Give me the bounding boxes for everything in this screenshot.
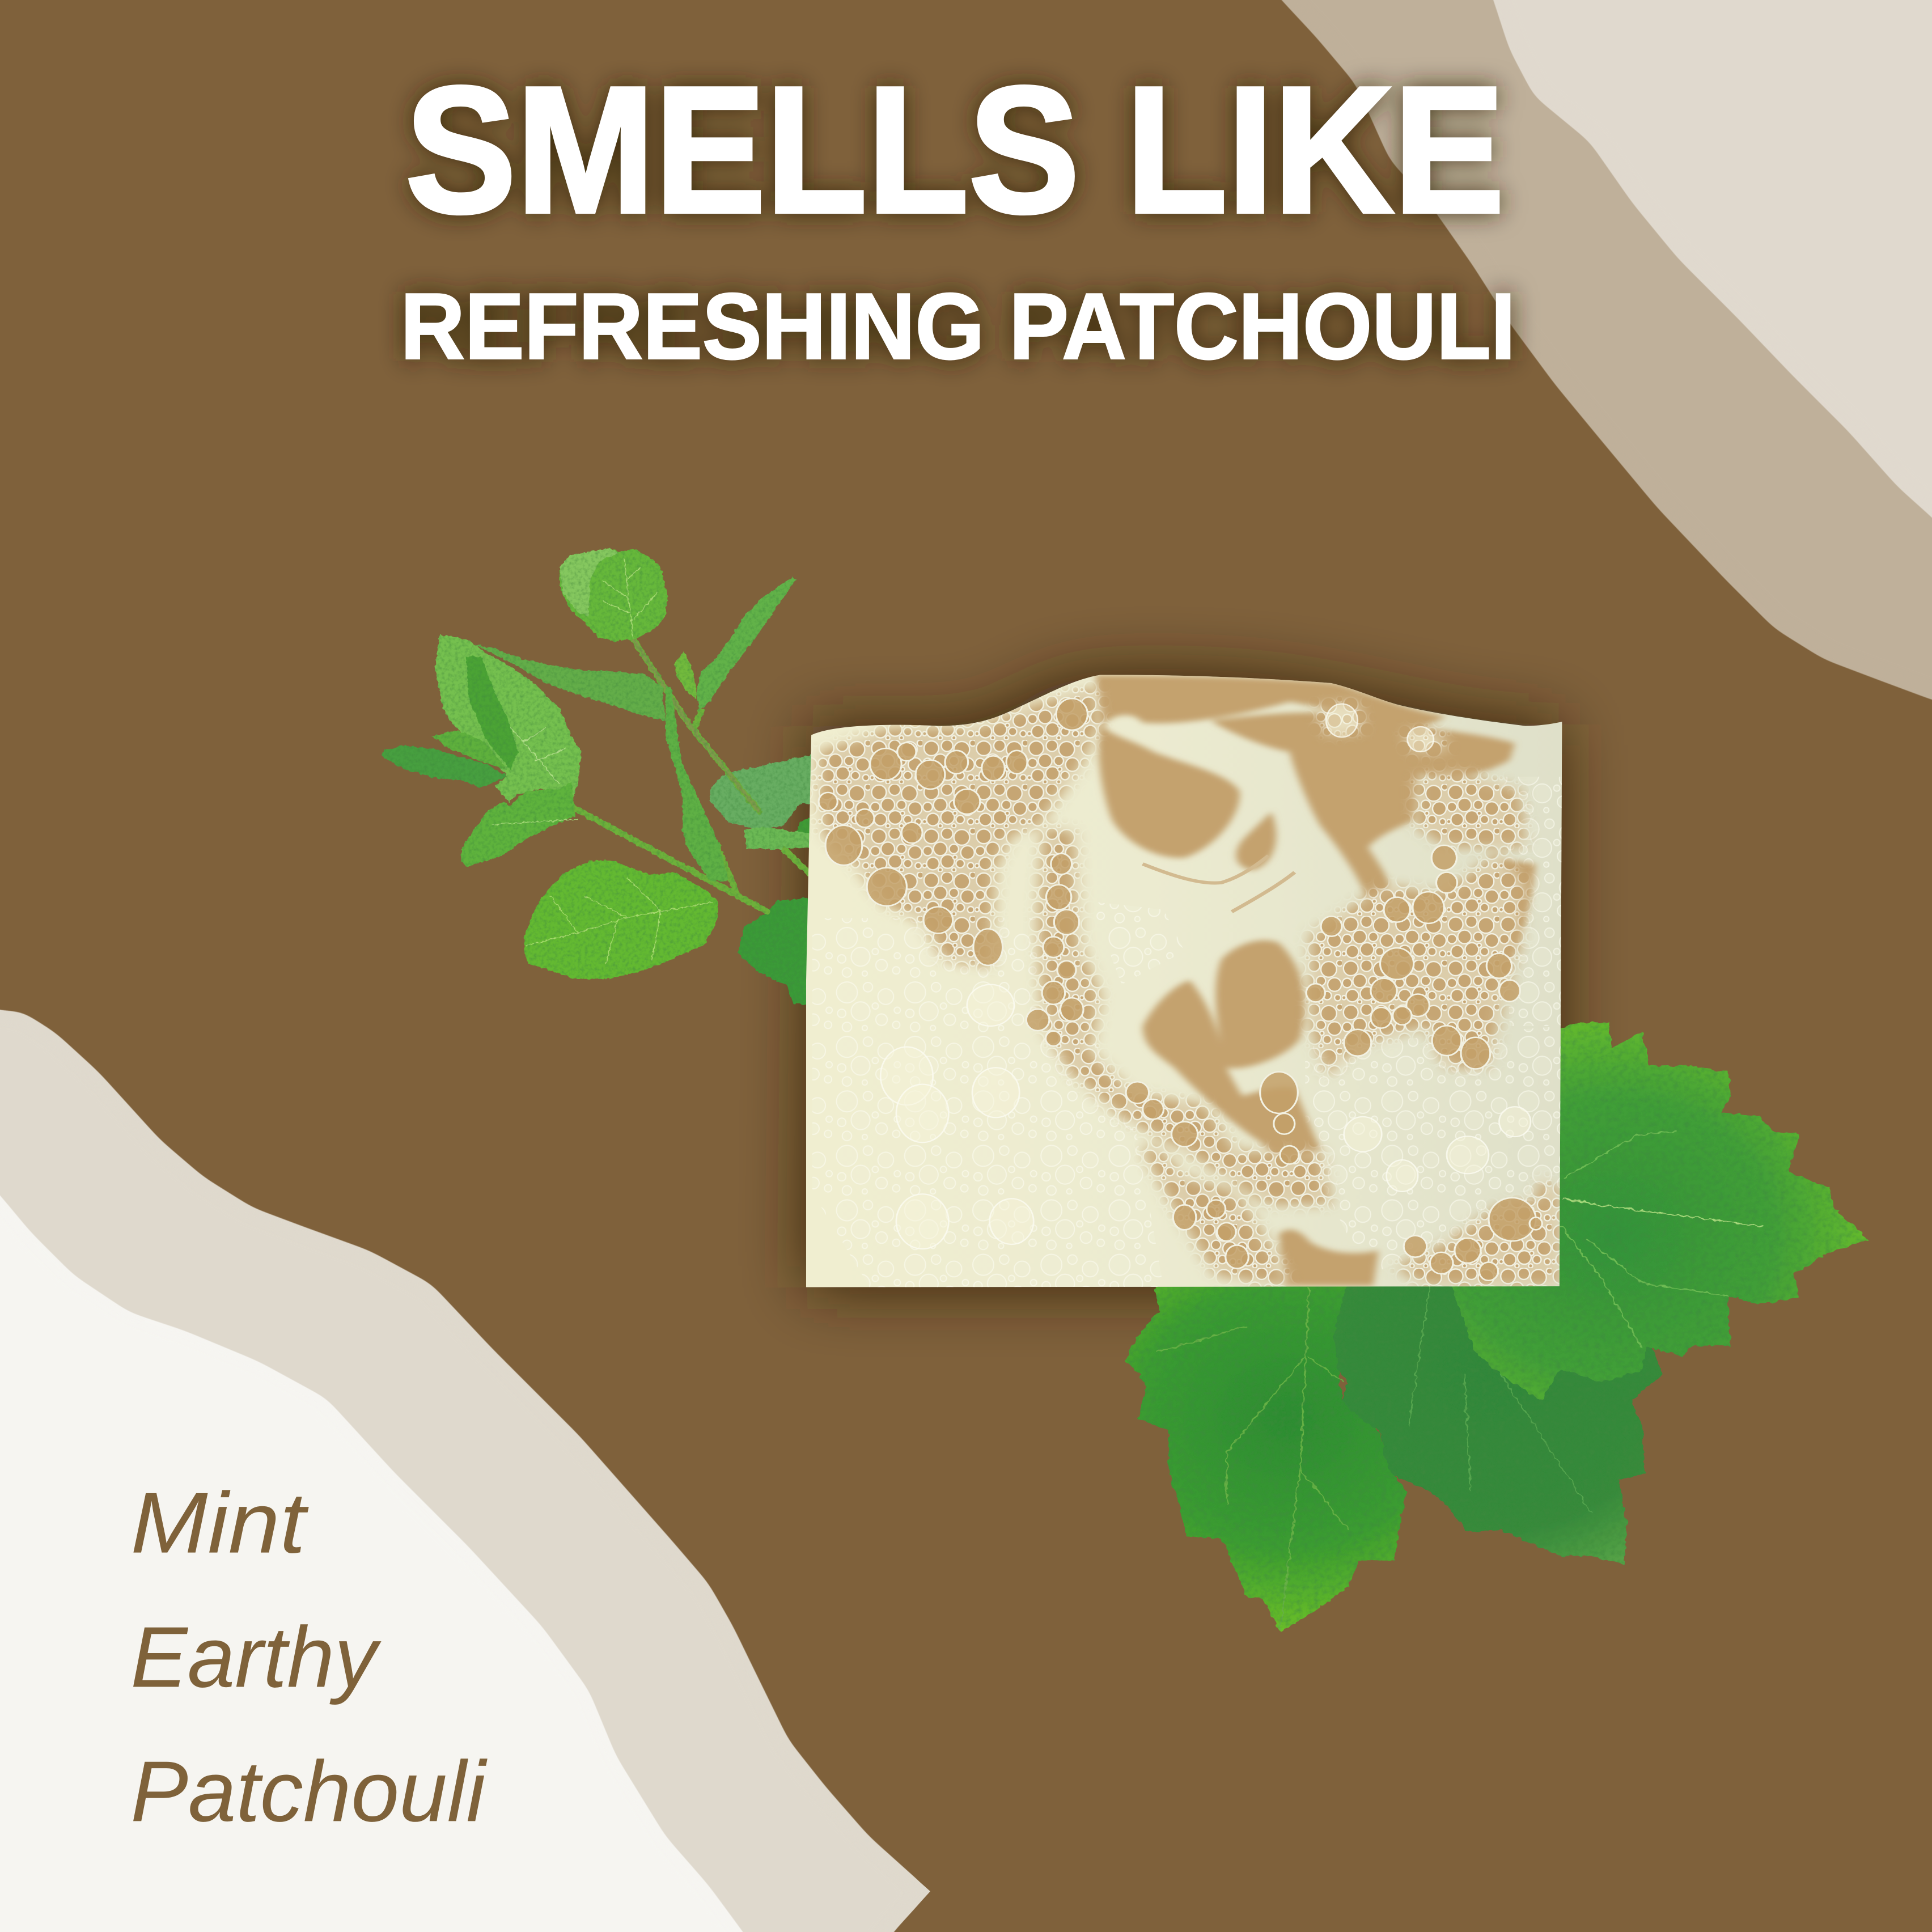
patchouli left leaf — [1126, 1278, 1406, 1632]
soap large bubbles — [819, 698, 1542, 1281]
corner shape: bottom left light — [0, 1115, 789, 1932]
mint far left leaf — [382, 745, 507, 789]
corner shape: top right tan — [1238, 0, 1932, 727]
patchouli middle leaf — [1333, 1278, 1662, 1565]
soap pale large bubbles — [880, 704, 1531, 1249]
soap swirl — [1095, 675, 1536, 1286]
mint lower left leaf — [461, 782, 575, 867]
title shadow: SMELLS LIKE — [405, 50, 1505, 251]
soap swirl streaks — [1143, 855, 1295, 912]
soap base — [802, 668, 1567, 1292]
mint lower leaf behind soap — [738, 897, 817, 1005]
mint small bud — [675, 652, 696, 700]
soap bar photo — [802, 668, 1567, 1292]
mint large left leaf — [435, 635, 581, 802]
scent notes list — [130, 1475, 488, 1840]
scent note: mint: Mint — [130, 1475, 309, 1571]
subheading: refreshing patchouli: REFRESHING PATCHOULI — [400, 274, 1515, 379]
title — [400, 50, 1515, 379]
soap shadow — [807, 675, 1558, 1287]
soap pale foam — [812, 777, 1562, 1288]
scent note: patchouli: Patchouli — [130, 1743, 488, 1840]
mint top leaf — [560, 548, 667, 642]
mint bottom big leaf — [524, 861, 718, 979]
mint narrow upper leaf — [696, 577, 796, 711]
icon: mint sprig — [382, 548, 817, 1005]
heading: smells like: SMELLS LIKE — [405, 50, 1505, 251]
mint right leaf behind soap — [710, 753, 817, 830]
mint small leaf — [432, 730, 507, 770]
title shadow: REFRESHING PATCHOULI — [400, 274, 1515, 379]
corner shape: bottom left tan tip — [813, 1851, 930, 1932]
mint vertical leaf — [666, 687, 728, 880]
corner shape: bottom left tan body — [0, 992, 930, 1932]
mint horizontal leaf — [473, 644, 666, 721]
title shadow — [400, 50, 1515, 379]
patchouli right leaf — [1450, 1023, 1870, 1400]
mint stems — [572, 639, 817, 912]
mint inner dark leaf — [466, 656, 518, 770]
soap brown foam — [802, 668, 1567, 1292]
icon: patchouli leaves — [1126, 1023, 1870, 1632]
scent note: earthy: Earthy — [130, 1609, 382, 1705]
corner shape: top right light — [1476, 0, 1932, 604]
